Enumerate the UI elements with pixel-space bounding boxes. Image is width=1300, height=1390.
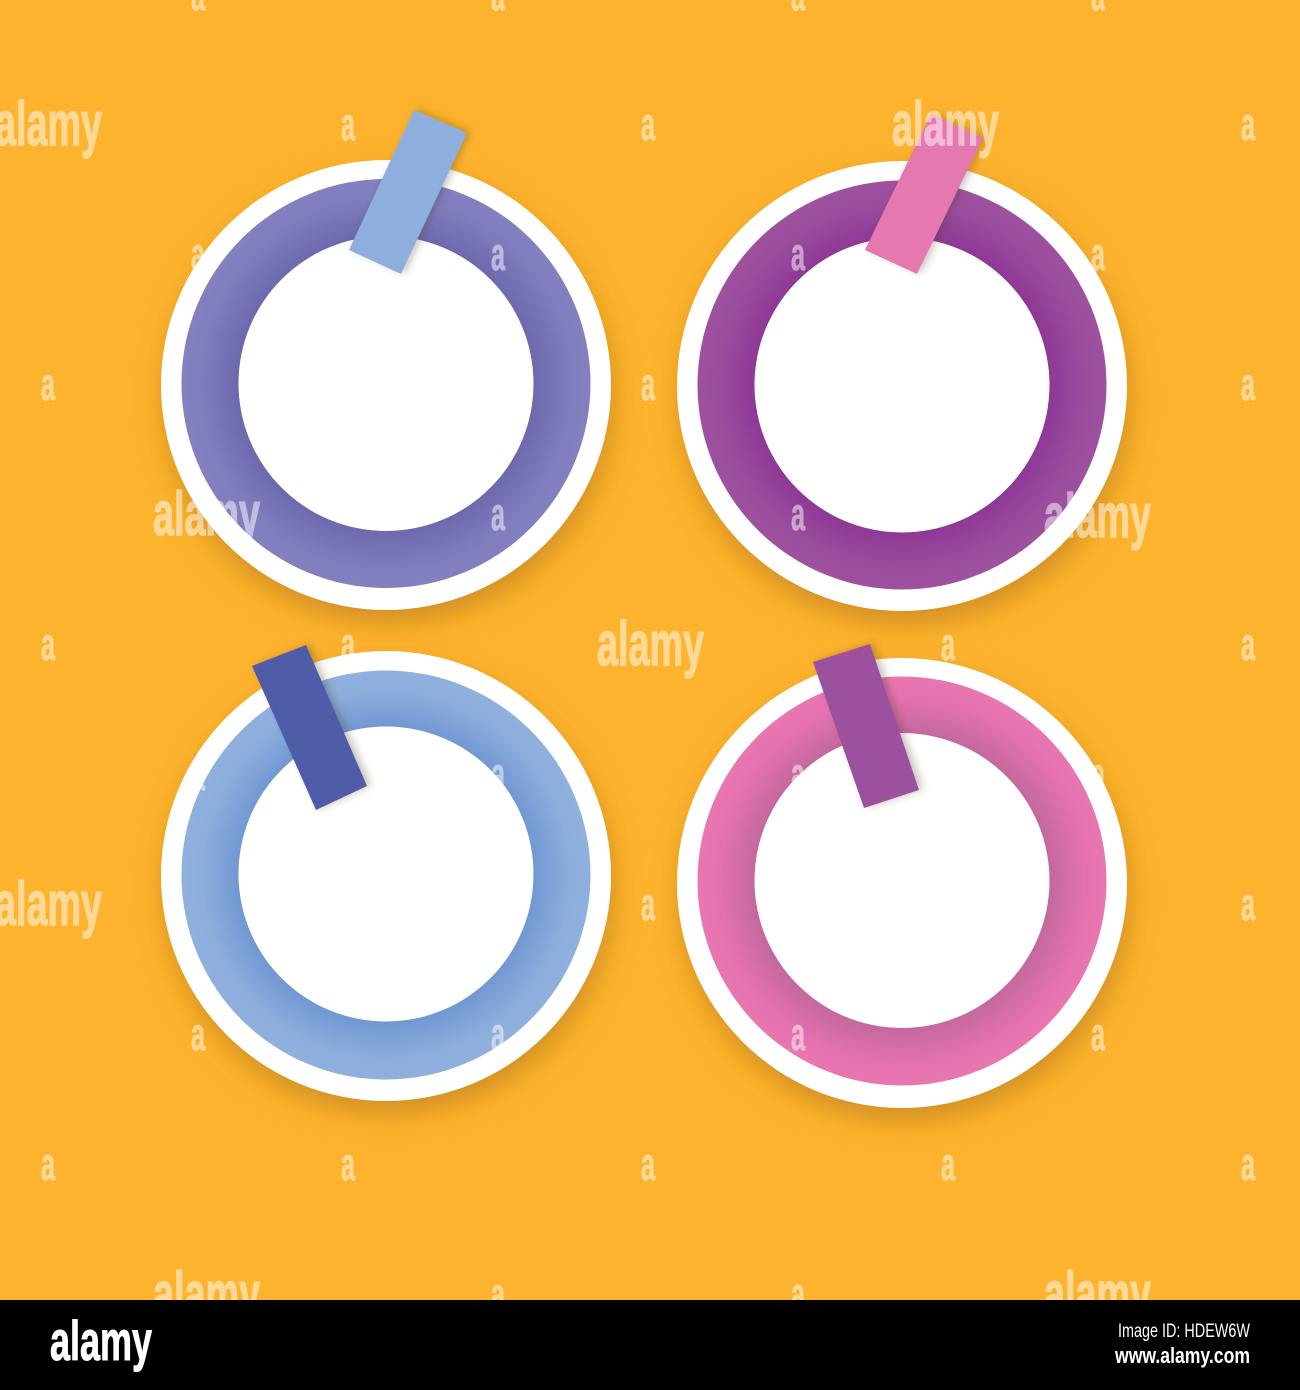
- badge: top right, purple ring: [677, 114, 1127, 611]
- watermark overlay: a: [791, 488, 805, 540]
- watermark overlay: a: [491, 1268, 505, 1320]
- watermark overlay: a: [1241, 618, 1255, 670]
- watermark overlay: a: [641, 878, 655, 930]
- watermark overlay: a: [1241, 1138, 1255, 1190]
- watermark overlay: a: [791, 748, 805, 800]
- watermark overlay: a: [641, 1138, 655, 1190]
- watermark overlay: alamy: [153, 1260, 260, 1329]
- violet ring: [182, 179, 590, 588]
- watermark overlay: a: [191, 1008, 205, 1060]
- badge: top left, violet ring: [161, 110, 611, 610]
- pink ring: [698, 676, 1106, 1086]
- watermark overlay: a: [41, 358, 55, 410]
- watermark overlay: a: [641, 358, 655, 410]
- watermark overlay: alamy: [0, 90, 102, 159]
- purple ring: [698, 180, 1106, 590]
- watermark overlay: a: [791, 1268, 805, 1320]
- white centre: [754, 238, 1050, 532]
- watermark overlay: a: [1241, 878, 1255, 930]
- watermark overlay: a: [1091, 748, 1105, 800]
- footer logo: alamy: [50, 1309, 152, 1372]
- watermark overlay: a: [791, 1008, 805, 1060]
- watermark overlay: alamy: [1044, 1260, 1151, 1329]
- watermark overlay: a: [191, 228, 205, 280]
- tape: light blue: [349, 110, 467, 274]
- badge: bottom left, light blue ring: [161, 645, 611, 1101]
- watermark overlay: a: [1091, 1008, 1105, 1060]
- light blue ring: [182, 670, 590, 1080]
- badge: bottom right, pink ring: [677, 644, 1127, 1108]
- white outer disc: [161, 160, 611, 610]
- watermark overlay: alamy: [153, 480, 260, 549]
- white centre: [754, 733, 1050, 1028]
- watermark overlay: a: [341, 618, 355, 670]
- footer bar: [0, 1300, 1300, 1390]
- watermark overlay: a: [1091, 228, 1105, 280]
- watermark overlay: a: [191, 748, 205, 800]
- watermark overlay: a: [41, 1138, 55, 1190]
- watermark overlay: a: [791, 228, 805, 280]
- white centre: [238, 236, 534, 531]
- watermark overlay: a: [941, 618, 955, 670]
- watermark overlay: alamy: [0, 870, 102, 939]
- watermark overlay: a: [341, 98, 355, 150]
- white outer disc: [161, 651, 611, 1101]
- white outer disc: [677, 161, 1127, 611]
- white centre: [238, 726, 534, 1022]
- white outer disc: [677, 658, 1127, 1108]
- image id: Image ID: HDEW6W: [1118, 1321, 1250, 1342]
- black strip: [0, 1300, 1300, 1390]
- tape: pink: [865, 114, 983, 274]
- watermark overlay: a: [491, 228, 505, 280]
- watermark overlay: alamy: [597, 610, 704, 679]
- watermark overlay: a: [641, 98, 655, 150]
- tape: purple: [813, 644, 919, 808]
- watermark overlay: a: [941, 1138, 955, 1190]
- watermark overlay: a: [491, 488, 505, 540]
- watermark overlay: a: [1241, 98, 1255, 150]
- website: www.alamy.com: [1114, 1343, 1250, 1368]
- tape: indigo: [252, 645, 367, 810]
- watermark overlay: a: [1241, 358, 1255, 410]
- watermark overlay: alamy: [892, 90, 999, 159]
- watermark overlay: a: [41, 618, 55, 670]
- watermark overlay: a: [491, 748, 505, 800]
- watermark overlay: alamy: [1044, 482, 1151, 551]
- watermark overlay: a: [491, 1008, 505, 1060]
- watermark overlay: a: [341, 1138, 355, 1190]
